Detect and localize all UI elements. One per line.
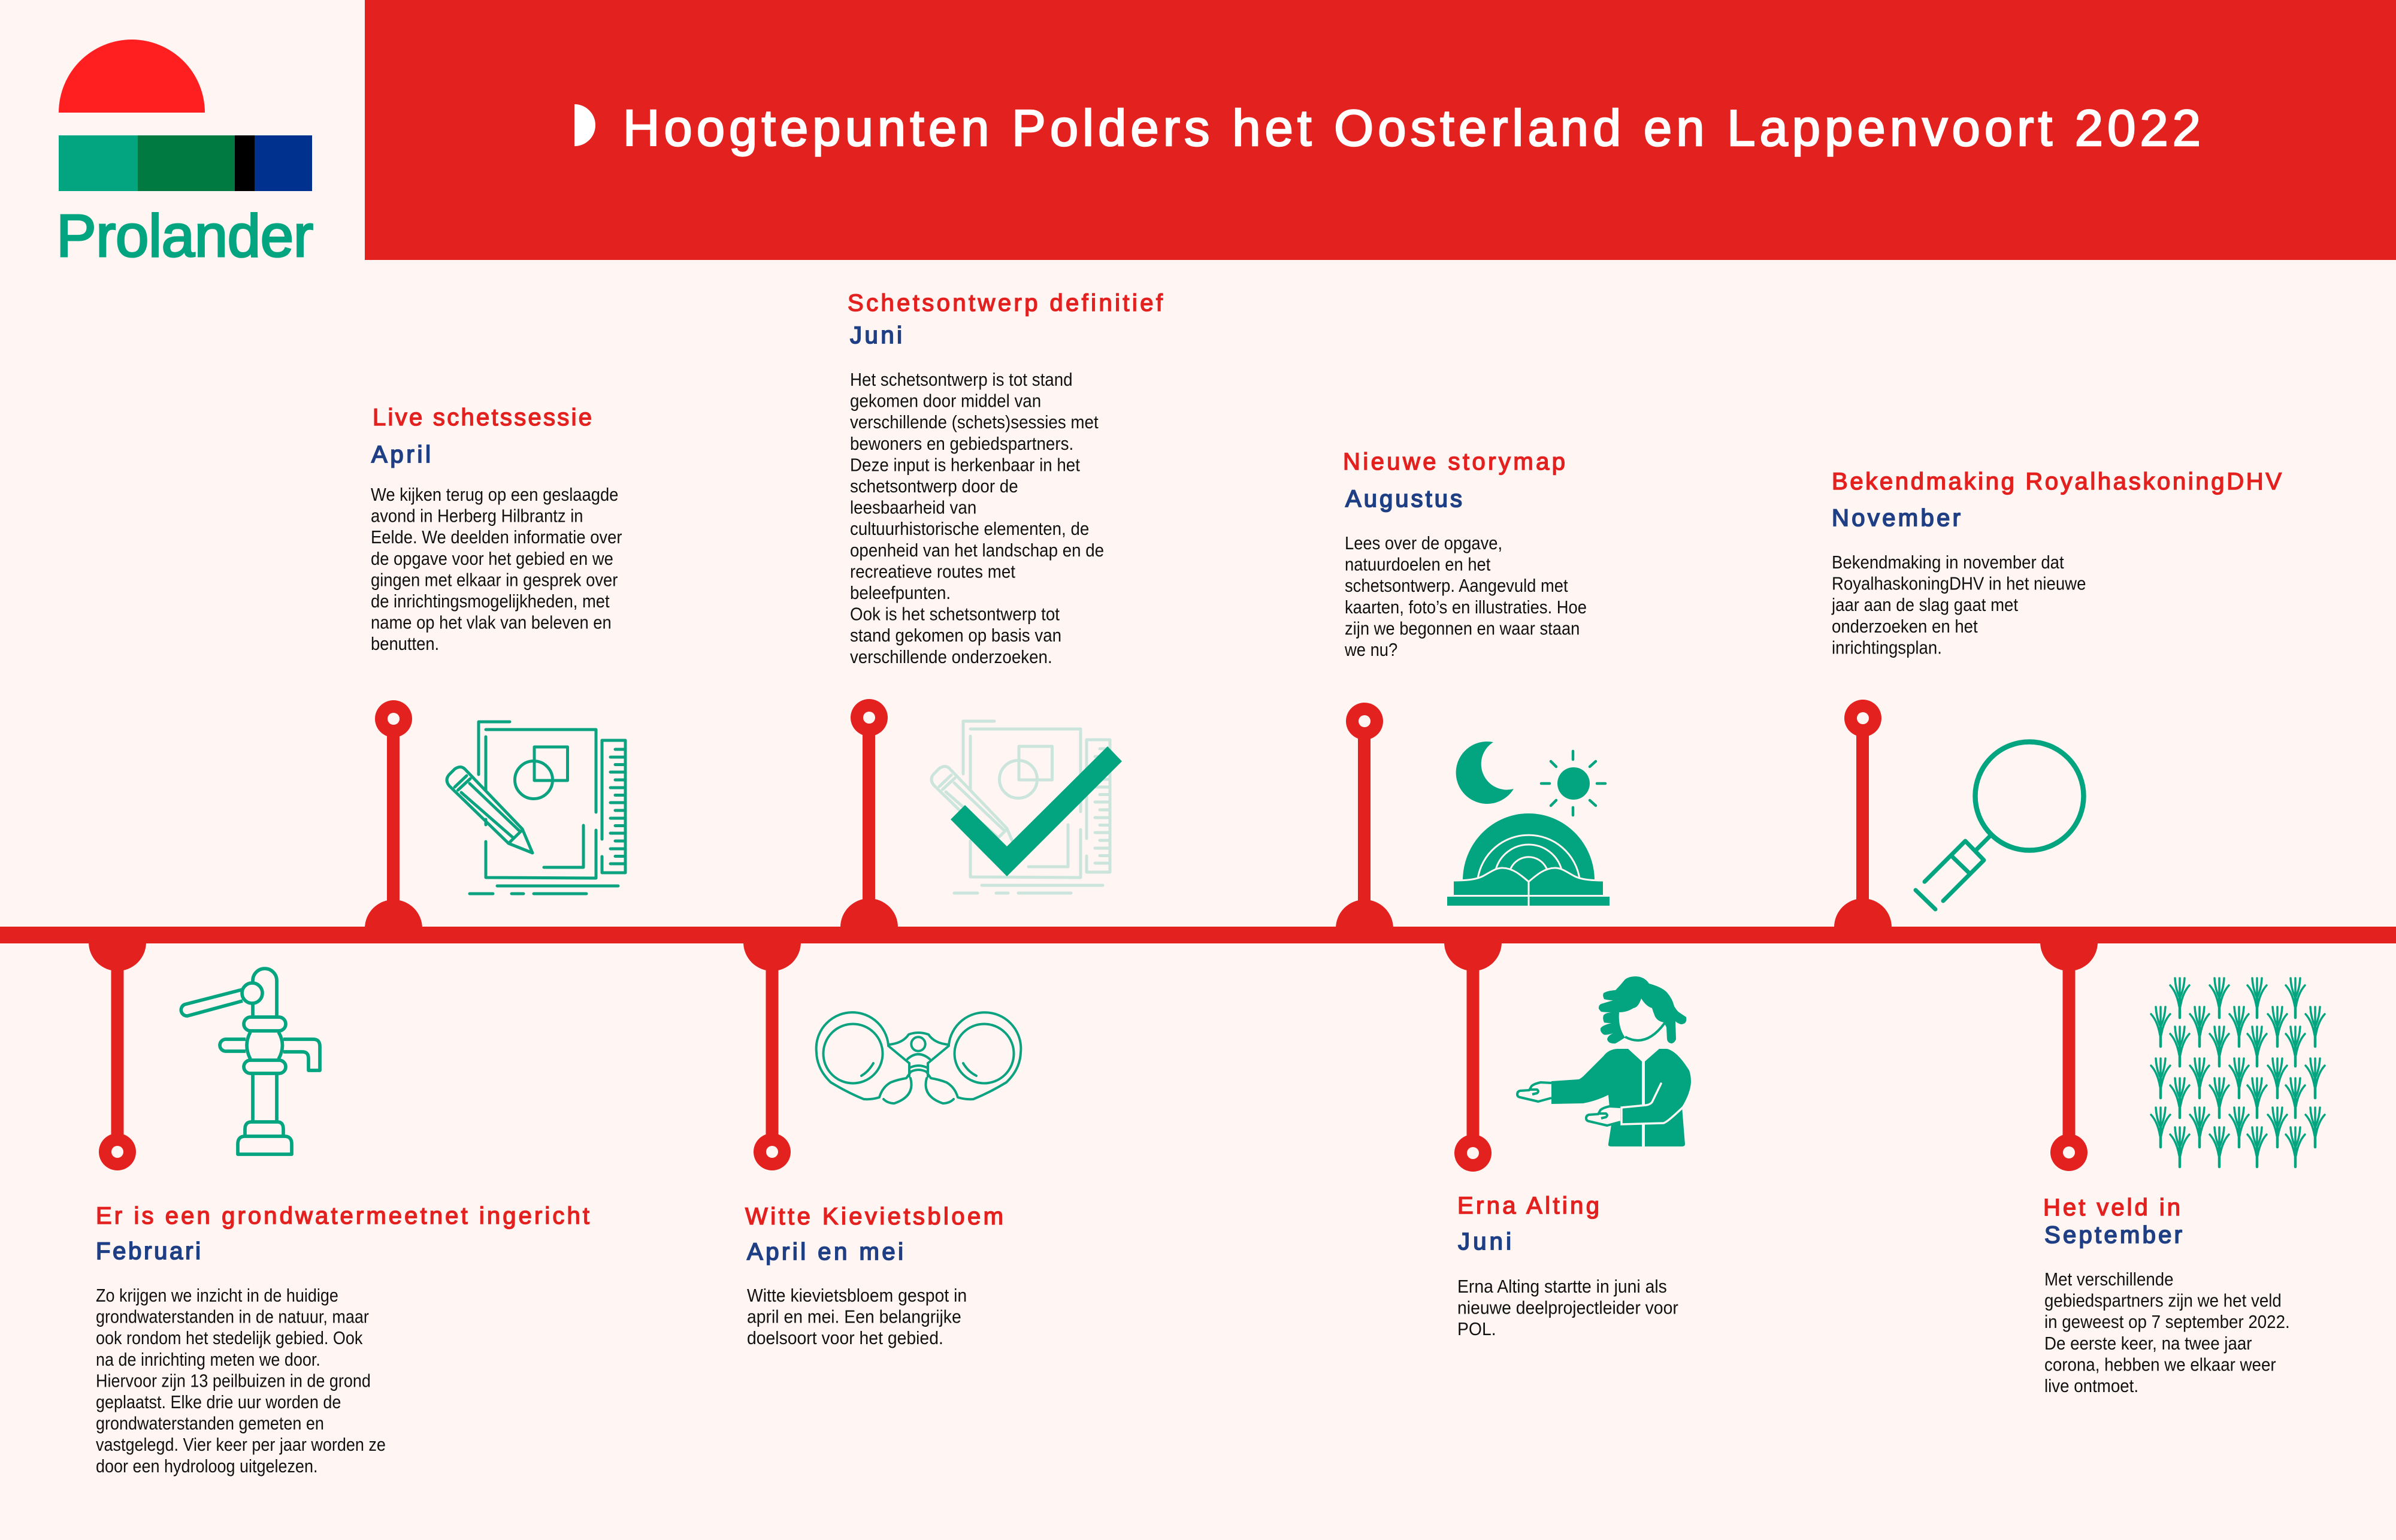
body text: avond in Herberg Hilbrantz in [371, 506, 583, 527]
month: April [371, 441, 431, 468]
body text: de opgave voor het gebied en we [371, 549, 613, 569]
body text: corona, hebben we elkaar weer [2044, 1355, 2276, 1375]
body text: We kijken terug op een geslaagde [371, 485, 618, 505]
icon: person presenting [1517, 976, 1691, 1146]
body text: stand gekomen op basis van [850, 626, 1061, 646]
body text: grondwaterstanden in de natuur, maar [96, 1307, 369, 1327]
icon: water pump [181, 969, 320, 1154]
panel: schetsontwerp definitief [848, 290, 1163, 667]
body text: vastgelegd. Vier keer per jaar worden ze [96, 1435, 386, 1456]
heading: Er is een grondwatermeetnet ingericht [96, 1203, 589, 1229]
body text: Deze input is herkenbaar in het [850, 455, 1080, 476]
heading: Witte Kievietsbloem [745, 1203, 1003, 1230]
body text: Zo krijgen we inzicht in de huidige [96, 1286, 338, 1306]
jacket [1551, 1049, 1691, 1146]
body text: Eelde. We deelden informatie over [371, 528, 622, 548]
body text: cultuurhistorische elementen, de [850, 519, 1089, 540]
body text: De eerste keer, na twee jaar [2044, 1334, 2252, 1354]
timeline pin: juni schetsontwerp [840, 699, 898, 927]
right hand [1586, 1106, 1620, 1125]
panel: live schetssessie [371, 404, 622, 655]
panel: het veld in september [2043, 1194, 2290, 1396]
month: Juni [850, 322, 902, 349]
body text: schetsontwerp. Aangevuld met [1345, 576, 1568, 597]
body text: gekomen door middel van [850, 391, 1041, 412]
icon: sketch with pencil and ruler [447, 722, 625, 894]
body text: leesbaarheid van [850, 498, 976, 518]
body text: jaar aan de slag gaat met [1831, 595, 2018, 616]
body text: geplaatst. Elke drie uur worden de [96, 1393, 341, 1412]
heading: Nieuwe storymap [1343, 449, 1565, 475]
body text: Lees over de opgave, [1345, 534, 1502, 553]
month: November [1832, 505, 1961, 531]
timeline pin: september [2040, 942, 2098, 1171]
month: Februari [96, 1238, 201, 1264]
panel: erna alting [1457, 1193, 1678, 1339]
body text: kaarten, foto’s en illustraties. Hoe [1345, 597, 1587, 618]
panel: bekendmaking RoyalhaskoningDHV [1831, 468, 2282, 658]
body text: Witte kievietsbloem gespot in [747, 1285, 967, 1306]
timeline pin: november [1834, 700, 1892, 927]
heading: Schetsontwerp definitief [848, 290, 1163, 316]
logo: Prolander [56, 40, 313, 270]
chin [1625, 1023, 1665, 1040]
body text: doelsoort voor het gebied. [747, 1328, 943, 1348]
body text: in geweest op 7 september 2022. [2044, 1312, 2290, 1333]
body text: verschillende onderzoeken. [850, 648, 1052, 667]
hair [1599, 976, 1686, 1043]
month: Juni [1458, 1229, 1511, 1255]
icon: approved sketch with check mark [931, 721, 1122, 893]
heading: Het veld in [2043, 1194, 2180, 1221]
heading: Erna Alting [1457, 1193, 1599, 1219]
title: Hoogtepunten Polders het Oosterland en Lappenvoort 2022 [623, 100, 2201, 157]
body text: april en mei. Een belangrijke [747, 1307, 961, 1327]
timeline axis [0, 927, 2396, 943]
panel: nieuwe storymap [1343, 449, 1587, 660]
body text: recreatieve routes met [850, 562, 1015, 582]
icon: half moon [574, 104, 595, 146]
logo colour bar [59, 135, 312, 191]
timeline pin: april [365, 700, 422, 928]
body text: schetsontwerp door de [850, 477, 1018, 497]
body text: verschillende (schets)sessies met [850, 413, 1099, 433]
body text: benutten. [371, 634, 439, 655]
body text: name op het vlak van beleven en [371, 613, 612, 633]
body text: we nu? [1344, 640, 1397, 660]
body text: natuurdoelen en het [1345, 555, 1490, 575]
heading: Live schetssessie [373, 404, 592, 431]
body text: inrichtingsplan. [1832, 638, 1942, 658]
timeline pin: februari [89, 942, 146, 1170]
body text: bewoners en gebiedspartners. [850, 434, 1073, 454]
left hand [1517, 1082, 1551, 1102]
body text: zijn we begonnen en waar staan [1345, 619, 1580, 639]
body text: nieuwe deelprojectleider voor [1457, 1298, 1678, 1318]
header band [365, 0, 2396, 260]
icon: binoculars [816, 1012, 1021, 1103]
logo wordmark: Prolander [56, 202, 313, 270]
body text: na de inrichting meten we door. [96, 1350, 320, 1370]
body text: RoyalhaskoningDHV in het nieuwe [1832, 574, 2086, 594]
month: September [2044, 1222, 2182, 1248]
month: April en mei [747, 1239, 903, 1265]
panel: grondwatermeetnet [96, 1203, 589, 1477]
icon: moon, sun and open book [1447, 742, 1610, 906]
body text: Met verschillende [2044, 1270, 2174, 1290]
body text: gingen met elkaar in gesprek over [371, 570, 618, 591]
body text: Het schetsontwerp is tot stand [850, 370, 1073, 390]
body text: Bekendmaking in november dat [1832, 553, 2064, 573]
month: Augustus [1345, 486, 1462, 512]
body text: POL. [1457, 1319, 1496, 1339]
icon: field of plants [2151, 978, 2325, 1167]
body text: gebiedspartners zijn we het veld [2044, 1291, 2282, 1311]
body text: Ook is het schetsontwerp tot [850, 604, 1060, 625]
heading: Bekendmaking RoyalhaskoningDHV [1832, 468, 2282, 495]
forearm [1621, 1084, 1683, 1124]
body text: de inrichtingsmogelijkheden, met [371, 592, 610, 612]
body text: Hiervoor zijn 13 peilbuizen in de grond [96, 1371, 371, 1391]
timeline pin: juni Erna [1444, 942, 1502, 1172]
body text: openheid van het landschap en de [850, 541, 1104, 561]
body text: onderzoeken en het [1832, 617, 1978, 637]
body text: ook rondom het stedelijk gebied. Ook [96, 1329, 363, 1349]
panel: witte kievietsbloem [745, 1203, 1003, 1348]
body text: live ontmoet. [2044, 1376, 2138, 1396]
body text: beleefpunten. [850, 583, 951, 603]
logo red dome [59, 40, 205, 113]
icon: magnifying glass [1916, 742, 2083, 909]
timeline pin: april en mei [743, 942, 801, 1170]
body text: door een hydroloog uitgelezen. [96, 1456, 317, 1477]
body text: grondwaterstanden gemeten en [96, 1414, 324, 1434]
body text: Erna Alting startte in juni als [1457, 1276, 1667, 1297]
timeline pin: augustus [1336, 703, 1393, 928]
